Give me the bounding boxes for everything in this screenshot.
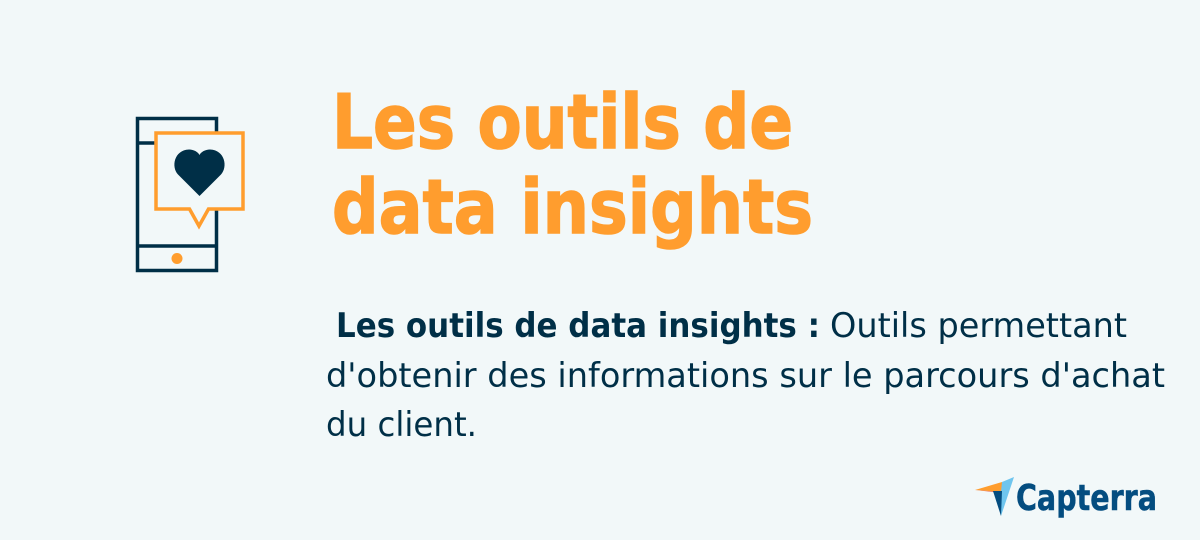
icon: phone button	[172, 253, 182, 264]
icon: phone with heart speech bubble	[137, 118, 243, 270]
icon: heart	[174, 150, 225, 196]
icon: Capterra arrow mark	[975, 477, 1014, 516]
title: data insights	[332, 163, 813, 251]
title	[332, 78, 813, 251]
Capterra logo	[975, 477, 1157, 519]
wordmark: Capterra	[1016, 478, 1157, 519]
definition text: Les outils de data insights :	[336, 306, 820, 346]
icon: phone outline	[137, 118, 217, 270]
icon: speech bubble	[156, 133, 243, 226]
title: Les outils de	[332, 78, 793, 166]
definition text: Outils permettant	[830, 306, 1127, 346]
definition text	[326, 306, 1165, 445]
definition text: du client.	[326, 405, 477, 445]
definition text: d'obtenir des informations sur le parcours d'achat	[326, 356, 1165, 396]
